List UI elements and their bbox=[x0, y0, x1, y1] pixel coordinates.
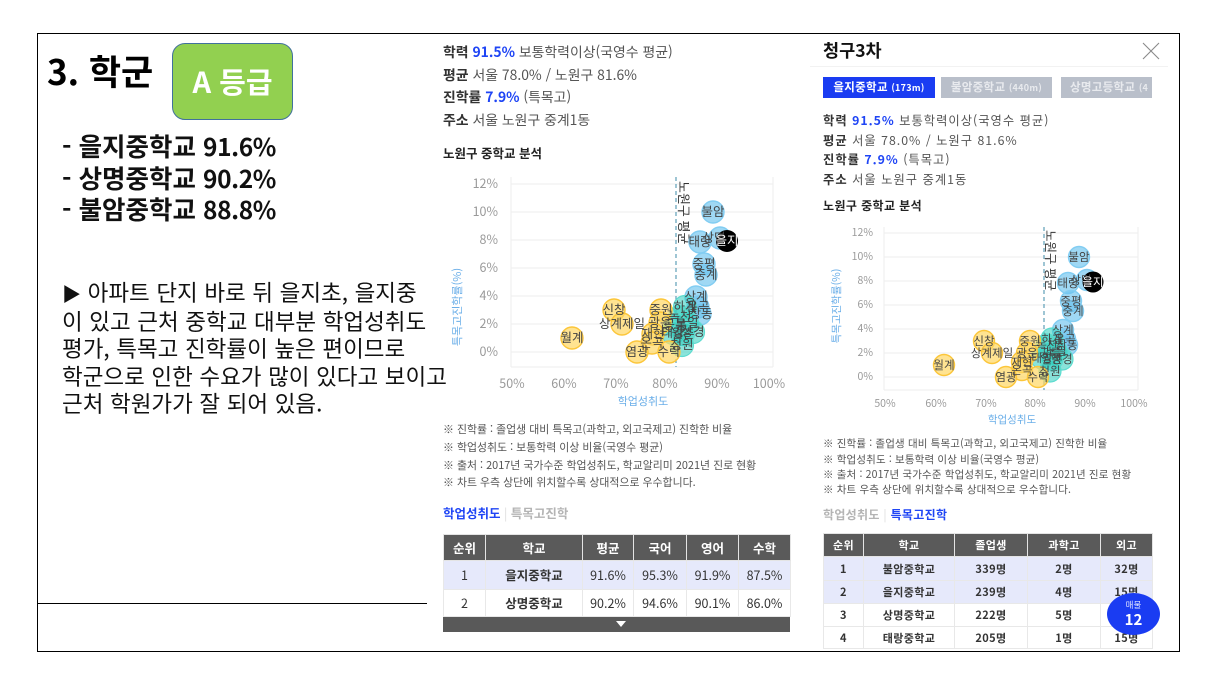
scatter chart left: 상계 bbox=[684, 286, 708, 305]
school score list: - 을지중학교 91.6% bbox=[62, 127, 276, 164]
ranking table right: 4 bbox=[840, 630, 847, 646]
scatter chart right: 태랑 bbox=[1057, 275, 1079, 291]
scatter chart left: 염광 bbox=[625, 341, 649, 360]
scatter chart left: 월촌 bbox=[671, 323, 695, 342]
ranking table left: 상명중학교 bbox=[505, 593, 563, 612]
ranking table right bbox=[823, 533, 1153, 649]
ranking table right: 1 bbox=[840, 560, 847, 576]
scatter chart right: 신창 bbox=[973, 333, 995, 349]
scatter chart right: 100% bbox=[1120, 396, 1148, 411]
ranking table left: 국어 bbox=[648, 538, 672, 556]
scatter chart left: 노원구 평균 bbox=[675, 181, 694, 244]
school stats: 주소 서울 노원구 중계1동 bbox=[823, 170, 967, 188]
school stats: 평균 서울 78.0% / 노원구 81.6% bbox=[823, 130, 1018, 148]
scatter chart left: 중원 bbox=[649, 299, 673, 318]
ranking table right: 205명 bbox=[975, 630, 1007, 646]
scatter chart left: 온곡 bbox=[686, 296, 710, 315]
ranking table left: 순위 bbox=[453, 538, 476, 556]
school tab active bbox=[823, 77, 935, 98]
scatter chart right: 60% bbox=[925, 396, 947, 411]
scatter chart left: 을지 bbox=[715, 230, 739, 249]
ranking table left: 학교 bbox=[522, 538, 546, 556]
scatter chart left: 노일 bbox=[675, 312, 699, 331]
scatter chart left: 50% bbox=[499, 373, 525, 392]
ranking table right: 불암중학교 bbox=[883, 560, 935, 576]
ranking table right: 순위 bbox=[833, 537, 854, 553]
scatter chart right: 하계 bbox=[1041, 331, 1063, 347]
ranking table left: 90.2% bbox=[590, 593, 626, 612]
notes right bbox=[823, 436, 1131, 497]
scatter chart right: 중평 bbox=[1060, 293, 1082, 309]
ranking table right: 239명 bbox=[975, 584, 1007, 600]
ranking table right: 태랑중학교 bbox=[883, 630, 935, 646]
scatter chart left: 80% bbox=[652, 373, 678, 392]
notes right: ※ 출처 : 2017년 국가수준 학업성취도, 학교알리미 2021년 진로 현황 bbox=[823, 467, 1131, 482]
school score list: - 불암중학교 88.8% bbox=[62, 190, 276, 227]
scatter chart left: 온곡 bbox=[640, 332, 664, 351]
chart heading: 노원구 중학교 분석 bbox=[823, 197, 922, 214]
scatter chart left: 수락 bbox=[657, 341, 681, 360]
scatter chart left: 0% bbox=[480, 341, 498, 360]
ranking table right: 2 bbox=[840, 584, 847, 600]
scatter chart left: 2% bbox=[480, 313, 498, 332]
scatter chart right: 6% bbox=[858, 297, 873, 312]
school stats: 평균 서울 78.0% / 노원구 81.6% bbox=[443, 65, 637, 85]
scatter chart right: 80% bbox=[1024, 396, 1046, 411]
ranking table left: 95.3% bbox=[642, 565, 678, 584]
school score list: - 상명중학교 90.2% bbox=[62, 158, 276, 196]
scatter chart right: 을지 bbox=[1082, 274, 1104, 290]
school stats: 학력 91.5% 보통학력이상(국영수 평균) bbox=[823, 111, 1049, 129]
ranking table right: 222명 bbox=[975, 607, 1007, 623]
school tab bbox=[941, 77, 1052, 98]
scatter chart left: 학업성취도 bbox=[618, 393, 668, 409]
scatter chart right: 재현 bbox=[1011, 354, 1033, 370]
school score list bbox=[62, 127, 276, 227]
school tab clipped: 상명고등학교 (4 bbox=[1070, 79, 1148, 95]
notes left: ※ 차트 우측 상단에 위치할수록 상대적으로 우수합니다. bbox=[443, 474, 696, 490]
table tabs left: 학업성취도 | 특목고진학 bbox=[443, 503, 568, 522]
school tab clipped bbox=[1061, 77, 1152, 98]
icon: down triangle bbox=[616, 621, 626, 627]
ranking table left: 90.1% bbox=[695, 593, 730, 612]
school tab active: 을지중학교 (173m) bbox=[833, 79, 925, 95]
scatter chart left: 월계 bbox=[560, 327, 584, 346]
scatter chart left: 신창 bbox=[602, 299, 626, 318]
scatter chart right: 학업성취도 bbox=[988, 412, 1036, 427]
ranking table left: 2 bbox=[461, 593, 468, 612]
ranking table left: 1 bbox=[461, 565, 468, 584]
ranking table right: 학교 bbox=[898, 537, 920, 553]
scatter chart left: 60% bbox=[551, 373, 577, 392]
ranking table right: 3 bbox=[840, 607, 847, 623]
grade badge bbox=[172, 43, 293, 120]
school tab: 불암중학교 (440m) bbox=[951, 79, 1042, 95]
ranking table right: 5명 bbox=[1055, 607, 1073, 623]
ranking table right: 339명 bbox=[975, 560, 1007, 576]
scatter chart left: 불암 bbox=[701, 201, 725, 220]
ranking table right: 15명 bbox=[1114, 630, 1139, 646]
notes left: ※ 학업성취도 : 보통학력 이상 비율(국영수 평균) bbox=[443, 439, 663, 455]
scatter chart right: 광운 bbox=[1016, 345, 1038, 361]
scatter chart right: 불암 bbox=[1068, 249, 1090, 265]
scatter chart left: 90% bbox=[704, 373, 730, 392]
scatter chart left: 상경 bbox=[681, 321, 705, 340]
scatter chart left: 70% bbox=[603, 373, 629, 392]
scatter chart left: 태랑 bbox=[688, 231, 712, 250]
scatter chart left: 하계 bbox=[673, 296, 697, 315]
scatter chart left: 10% bbox=[473, 201, 498, 220]
ranking table right: 을지중학교 bbox=[883, 584, 935, 600]
scatter chart right: 중계 bbox=[1062, 303, 1084, 319]
listing count bubble: 매물 bbox=[1126, 599, 1141, 611]
school stats: 진학률 7.9% (특목고) bbox=[823, 150, 950, 168]
scatter chart right: 2% bbox=[858, 345, 873, 360]
scatter chart left: 6% bbox=[480, 257, 498, 276]
title: 3. 학군 bbox=[47, 45, 153, 96]
chart heading: 노원구 중학교 분석 bbox=[443, 143, 542, 162]
ranking table right: 4명 bbox=[1055, 584, 1073, 600]
ranking table left: 수학 bbox=[753, 538, 776, 556]
school stats bbox=[823, 111, 1049, 188]
scatter chart left: 재현 bbox=[641, 323, 665, 342]
table tabs right: 학업성취도 | 특목고진학 bbox=[823, 506, 947, 523]
icon: close bbox=[1142, 42, 1160, 60]
commentary text: 평가, 특목고 진학률이 높은 편이므로 bbox=[62, 332, 405, 364]
scatter chart left bbox=[449, 173, 786, 409]
scatter chart right: 상경 bbox=[1051, 351, 1073, 367]
ranking table left: 평균 bbox=[596, 538, 620, 556]
scatter chart right: 70% bbox=[975, 396, 997, 411]
notes right: ※ 진학률 : 졸업생 대비 특목고(과학고, 외고국제고) 진학한 비율 bbox=[823, 436, 1107, 451]
scatter chart left: 8% bbox=[480, 229, 498, 248]
bottom rule bbox=[38, 603, 427, 604]
ranking table left: 87.5% bbox=[747, 565, 782, 584]
scatter chart right: 온곡 bbox=[1011, 362, 1033, 378]
divider bbox=[810, 66, 1168, 67]
ranking table right: 32명 bbox=[1114, 560, 1139, 576]
ranking table left bbox=[443, 534, 791, 617]
ranking table right: 1명 bbox=[1055, 630, 1073, 646]
ranking table right: 2명 bbox=[1055, 560, 1073, 576]
commentary text bbox=[62, 276, 447, 419]
scatter chart left: 중평 bbox=[692, 253, 716, 272]
grade badge: A 등급 bbox=[192, 60, 273, 102]
scatter chart right: 90% bbox=[1074, 396, 1096, 411]
ranking table left: 86.0% bbox=[747, 593, 782, 612]
panel: school detail right bbox=[810, 38, 1168, 214]
scatter chart right: 10% bbox=[852, 249, 873, 264]
ranking table right: 졸업생 bbox=[975, 537, 1007, 553]
table expand bar bbox=[443, 617, 790, 632]
scatter chart right: 공릉 bbox=[1039, 345, 1061, 361]
scatter chart left: 특목고진학률(%) bbox=[449, 268, 465, 346]
scatter chart left: 녹천 bbox=[668, 306, 692, 325]
scatter chart left: 태강 bbox=[661, 322, 685, 341]
scatter chart left: 중계 bbox=[694, 264, 718, 283]
notes right: ※ 차트 우측 상단에 위치할수록 상대적으로 우수합니다. bbox=[823, 482, 1071, 497]
scatter chart right: 상계제일 bbox=[971, 345, 1013, 361]
notes right: ※ 학업성취도 : 보통학력 이상 비율(국영수 평균) bbox=[823, 452, 1039, 467]
scatter chart right: 창동 bbox=[1056, 337, 1078, 353]
notes left bbox=[443, 421, 756, 490]
scatter chart right: 온곡 bbox=[1054, 331, 1076, 347]
scatter chart right: 청원 bbox=[1039, 363, 1061, 379]
ranking table right: 15명 bbox=[1114, 584, 1139, 600]
ranking table right: 상명중학교 bbox=[883, 607, 935, 623]
scatter chart right: 0% bbox=[858, 369, 873, 384]
school stats: 학력 91.5% 보통학력이상(국영수 평균) bbox=[443, 42, 673, 62]
scatter chart right: 4% bbox=[858, 321, 873, 336]
ranking table left: 91.9% bbox=[695, 565, 730, 584]
commentary text: 이 있고 근처 중학교 대부분 학업성취도 bbox=[62, 304, 426, 336]
scatter chart left: 광운 bbox=[648, 312, 672, 331]
scatter chart right: 염광 bbox=[995, 369, 1017, 385]
scatter chart left: 12% bbox=[473, 173, 498, 192]
commentary text: ▶ 아파트 단지 바로 뒤 을지초, 을지중 bbox=[62, 276, 417, 308]
panel: school detail left bbox=[443, 42, 673, 162]
scatter chart right: 상명 bbox=[1070, 272, 1092, 288]
scatter chart left: 청원 bbox=[670, 334, 694, 353]
scatter chart right: 특목고진학률(%) bbox=[829, 269, 844, 343]
scatter chart right: 노원구 평균 bbox=[1042, 230, 1061, 291]
ranking table left: 을지중학교 bbox=[505, 565, 563, 584]
scatter chart right: 8% bbox=[858, 273, 873, 288]
ranking table left: 91.6% bbox=[590, 565, 626, 584]
scatter chart right: 월계 bbox=[933, 357, 955, 373]
scatter chart left: 공릉 bbox=[663, 314, 687, 333]
scatter chart left: 상명 bbox=[702, 227, 726, 246]
scatter chart right: 중원 bbox=[1019, 333, 1041, 349]
scatter chart left: 4% bbox=[480, 285, 498, 304]
ranking table left: 94.6% bbox=[642, 593, 678, 612]
listing count bubble: 12 bbox=[1125, 609, 1142, 630]
scatter chart left: 100% bbox=[753, 373, 786, 392]
commentary text: 학군으로 인한 수요가 많이 있다고 보이고 bbox=[62, 360, 447, 392]
school stats: 주소 서울 노원구 중계1동 bbox=[443, 110, 590, 130]
scatter chart right: 50% bbox=[874, 396, 896, 411]
scatter chart right bbox=[829, 225, 1148, 427]
scatter chart right: 상계 bbox=[1052, 322, 1074, 338]
panel title: 청구3차 bbox=[823, 38, 882, 63]
ranking table right: 과학고 bbox=[1048, 537, 1080, 553]
listing count bubble bbox=[1107, 593, 1160, 635]
scatter chart right: 12% bbox=[852, 225, 873, 240]
ranking table left: 영어 bbox=[701, 538, 724, 556]
ranking table right: 15명 bbox=[1114, 607, 1139, 623]
school stats: 진학률 7.9% (특목고) bbox=[443, 87, 571, 107]
notes left: ※ 진학률 : 졸업생 대비 특목고(과학고, 외고국제고) 진학한 비율 bbox=[443, 421, 732, 437]
scatter chart right: 노일 bbox=[1045, 343, 1067, 359]
scatter chart right: 태강 bbox=[1031, 350, 1053, 366]
commentary text: 근처 학원가가 잘 되어 있음. bbox=[62, 387, 322, 419]
scatter chart right: 수락 bbox=[1027, 369, 1049, 385]
scatter chart left: 창동 bbox=[689, 303, 713, 322]
ranking table right: 외고 bbox=[1116, 537, 1137, 553]
scatter chart right: 녹천 bbox=[1036, 337, 1058, 353]
scatter chart left: 상계제일 bbox=[599, 313, 645, 332]
scatter chart right: 월촌 bbox=[1041, 351, 1063, 367]
school stats bbox=[443, 42, 673, 130]
notes left: ※ 출처 : 2017년 국가수준 학업성취도, 학교알리미 2021년 진로 현황 bbox=[443, 457, 756, 473]
left text column bbox=[38, 43, 447, 604]
